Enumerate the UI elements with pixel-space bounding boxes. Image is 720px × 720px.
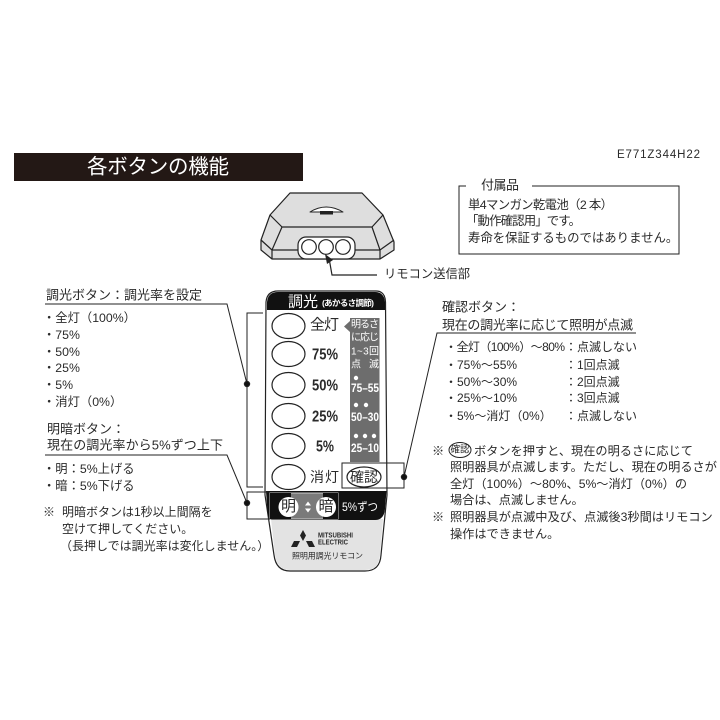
text: brightness list xyxy=(43,462,135,493)
dimming button labels: 25% xyxy=(312,408,338,426)
text: confirm notes: ボタンを押すと、現在の明るさに応じて xyxy=(474,444,693,458)
text: brightness note: 空けて押してください。 xyxy=(62,522,193,536)
grey indicator panel: 点 滅 xyxy=(351,358,379,370)
callout: brightness bracket xyxy=(45,455,270,519)
dimming button labels: 消灯 xyxy=(310,469,339,485)
icon: confirm badge xyxy=(449,442,471,458)
text: confirm blink list: ・25%～10% xyxy=(445,391,517,405)
confirm button xyxy=(347,467,381,487)
text: confirm button heading xyxy=(442,300,633,332)
text: confirm blink list: ：1回点滅 xyxy=(565,358,620,372)
title bar: 各ボタンの機能 xyxy=(87,156,229,178)
grey indicator panel: 25–10 xyxy=(351,443,379,455)
text: confirm blink list: ・5%～消灯（0%） xyxy=(445,409,552,423)
text: brightness note: ※ xyxy=(43,505,55,519)
brightness band: 明 xyxy=(281,498,296,515)
callout: confirm bracket xyxy=(342,333,636,488)
remote header: (あかるさ調節) xyxy=(322,298,374,308)
text: brightness button heading: 現在の調光率から5%ずつ上下 xyxy=(47,438,223,452)
text: confirm blink list: ：2回点滅 xyxy=(565,375,620,389)
grey indicator panel: 50–30 xyxy=(351,412,379,424)
text: confirm notes: ※ xyxy=(432,510,444,524)
text: confirm blink list: ：点滅しない xyxy=(565,409,637,423)
accessories heading: 付属品 xyxy=(481,178,519,192)
text: dimming levels list: ・全灯（100%） xyxy=(43,311,136,325)
text: dimming levels list: ・75% xyxy=(43,328,80,342)
text: confirm blink list xyxy=(445,340,637,423)
grey indicator panel xyxy=(344,318,380,462)
text: confirm notes: 照明器具が点滅します。ただし、現在の明るさが xyxy=(450,459,717,474)
text: dimming levels list: ・消灯（0%） xyxy=(43,395,122,409)
remote lower grey area xyxy=(271,519,383,570)
text: confirm button heading: 現在の調光率に応じて照明が点滅 xyxy=(442,318,633,332)
text: confirm blink list: ：点滅しない xyxy=(565,340,637,354)
remote header: 調光 xyxy=(288,294,318,310)
brightness band xyxy=(266,491,386,520)
text: confirm blink list: ：3回点滅 xyxy=(565,391,620,405)
text: confirm blink list: ・50%～30% xyxy=(445,375,517,389)
brand name xyxy=(318,532,353,546)
document code: E771Z344H22 xyxy=(617,149,700,161)
accessories text: 寿命を保証するものではありません。 xyxy=(468,230,678,245)
dimming button labels: 75% xyxy=(312,346,338,364)
transmitter label: リモコン送信部 xyxy=(384,266,470,281)
text: confirm blink list: ・全灯（100%）～80% xyxy=(445,340,565,354)
text: brightness note xyxy=(43,505,269,553)
text: dimming levels list: ・25% xyxy=(43,361,80,375)
text: confirm notes xyxy=(432,442,717,541)
remote header xyxy=(267,292,385,310)
text: confirm notes: 操作はできません。 xyxy=(450,526,559,541)
text: confirm notes: 全灯（100%）～80%、5%～消灯（0%）の xyxy=(450,477,687,491)
grey indicator panel: 明るさ xyxy=(351,318,379,330)
text: brightness note: 明暗ボタンは1秒以上間隔を xyxy=(62,505,213,519)
brightness band: 暗 xyxy=(318,498,334,515)
remote name: 照明用調光リモコン xyxy=(292,550,363,560)
text: confirm button heading: 確認ボタン： xyxy=(442,300,520,314)
accessories text: 「動作確認用」です。 xyxy=(466,213,581,228)
icon: three-diamond logo xyxy=(291,530,315,547)
panel: remote control xyxy=(265,291,387,571)
text: dimming levels list xyxy=(43,311,136,409)
text: brightness list: ・暗：5%下げる xyxy=(43,479,135,493)
text: brightness list: ・明：5%上げる xyxy=(43,462,135,476)
icon: confirm badge: 確認 xyxy=(450,444,470,456)
text: dimming levels list: ・50% xyxy=(43,345,80,359)
callout: dimming bracket xyxy=(45,304,263,487)
dimming buttons xyxy=(272,314,305,490)
title bar xyxy=(14,153,303,181)
remote body xyxy=(265,291,387,571)
accessories text xyxy=(466,198,678,245)
grey indicator panel: に応じ xyxy=(351,332,379,344)
confirm button: 確認 xyxy=(350,469,378,485)
text: brightness note: （長押しでは調光率は変化しません。） xyxy=(60,538,269,553)
text: confirm blink list: ・75%～55% xyxy=(445,358,517,372)
dimming button labels xyxy=(310,316,339,485)
panel: accessories xyxy=(459,178,679,254)
dimming button labels: 5% xyxy=(316,438,334,456)
grey indicator panel: 1~3回 xyxy=(351,346,379,358)
text: brightness button heading: 明暗ボタン： xyxy=(47,422,125,436)
brand name: ELECTRIC xyxy=(318,540,348,546)
text: confirm notes: 照明器具が点滅中及び、点滅後3秒間はリモコン xyxy=(450,509,713,524)
text: dimming levels list: ・5% xyxy=(43,378,73,392)
text: confirm notes: ※ xyxy=(432,444,444,458)
accessories text: 単4マンガン乾電池（2 本） xyxy=(468,198,613,212)
icon: transmitter unit on light xyxy=(261,193,394,259)
brand name: MITSUBISHI xyxy=(318,532,353,540)
text: dimming button heading: 調光ボタン：調光率を設定 xyxy=(46,288,202,302)
dimming button labels: 50% xyxy=(312,378,338,394)
grey indicator panel: 75–55 xyxy=(351,383,380,395)
brightness band: 5%ずつ xyxy=(342,500,378,514)
arrow: transmitter pointer xyxy=(325,254,377,275)
dimming button labels: 全灯 xyxy=(310,316,339,334)
text: brightness button heading xyxy=(47,422,223,452)
text: confirm notes: 場合は、点滅しません。 xyxy=(450,493,584,507)
